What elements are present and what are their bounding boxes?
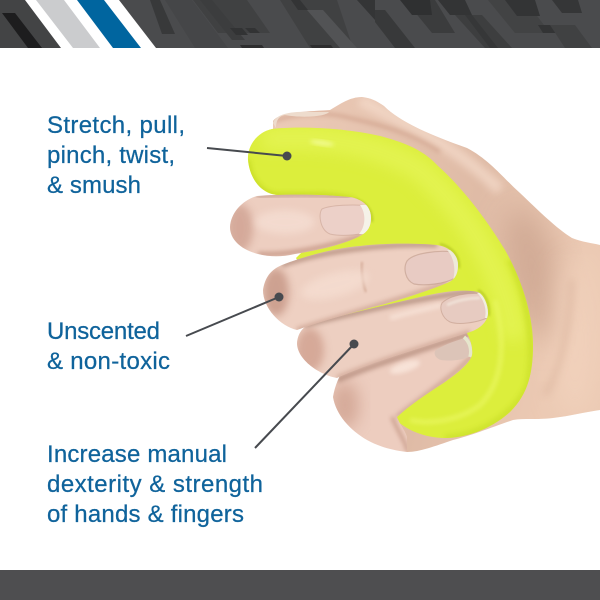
header: geometric texture (0, 0, 592, 48)
text: unscented: Unscented (47, 318, 160, 345)
text: stretch, pull, pinch: & smush (47, 172, 141, 199)
middle finger (263, 244, 459, 330)
text: stretch, pull, pinch (47, 112, 185, 199)
text: dexterity: of hands & fingers (47, 501, 244, 528)
text: stretch, pull, pinch: pinch, twist, (47, 142, 175, 169)
hand photo illustration (227, 97, 600, 452)
putty blob (248, 128, 533, 438)
header: grey stripe (36, 0, 100, 48)
text: unscented: & non-toxic (47, 348, 170, 375)
palm and wrist (273, 97, 600, 452)
text: dexterity (47, 441, 263, 528)
leader line: dexterity (255, 340, 358, 448)
index finger (227, 195, 372, 256)
thumb nail (273, 112, 329, 128)
text: dexterity: Increase manual (47, 441, 227, 468)
header: blue stripe (77, 0, 141, 48)
text: dexterity: dexterity & strength (47, 471, 263, 498)
header: white stripe (25, 0, 156, 48)
little finger (331, 328, 472, 452)
header band (0, 0, 600, 48)
ring finger (296, 291, 488, 378)
text: stretch, pull, pinch: Stretch, pull, (47, 112, 185, 139)
leader line: stretch (207, 148, 292, 160)
text: unscented (47, 318, 170, 375)
footer band (0, 570, 600, 600)
leader line: unscented (186, 292, 284, 336)
